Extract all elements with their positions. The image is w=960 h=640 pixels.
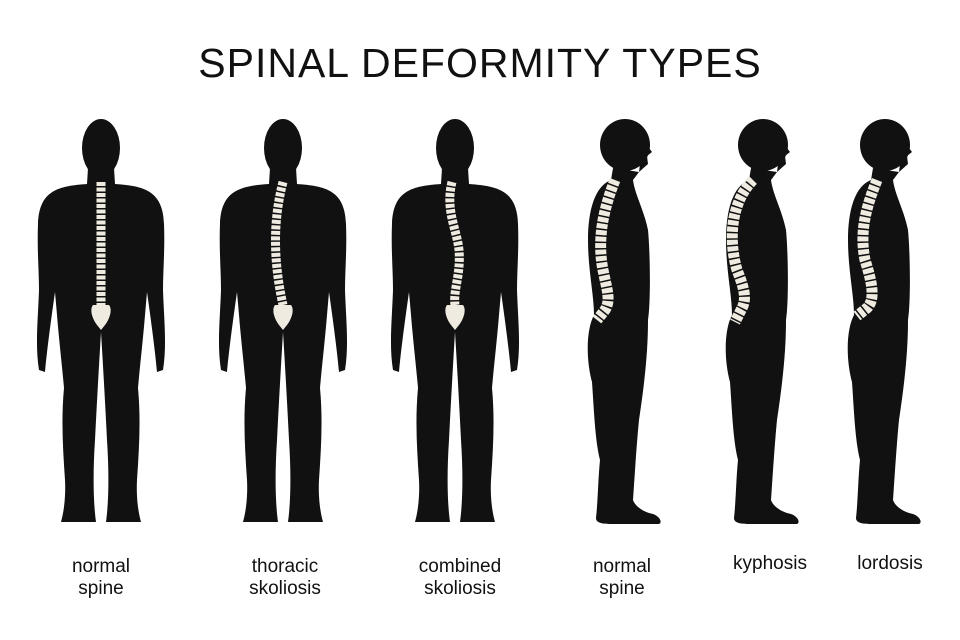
- figure: thoracic scoliosis: [219, 119, 347, 522]
- label: normal spine: normal: [72, 556, 130, 577]
- label: normal spine side: normal: [593, 556, 651, 577]
- label: thoracic skoliosis: thoracic: [252, 556, 318, 577]
- label: normal spine: [72, 556, 130, 599]
- label: combined skoliosis: combined: [419, 556, 501, 577]
- label: combined skoliosis: [419, 556, 501, 599]
- label: thoracic skoliosis: [249, 556, 321, 599]
- figure: kyphosis: [726, 119, 799, 524]
- figure: lordosis: [848, 119, 921, 524]
- label: normal spine side: spine: [599, 578, 645, 599]
- label: thoracic skoliosis: skoliosis: [249, 578, 321, 599]
- label: lordosis: lordosis: [857, 553, 923, 574]
- figure: side normal: [588, 119, 661, 524]
- label: normal spine side: [593, 556, 651, 599]
- title: SPINAL DEFORMITY TYPES: [198, 40, 762, 86]
- label: normal spine: spine: [78, 578, 124, 599]
- figure: front normal: [37, 119, 165, 522]
- figure: combined scoliosis: [391, 119, 519, 522]
- label: kyphosis: kyphosis: [733, 553, 807, 574]
- label: combined skoliosis: skoliosis: [424, 578, 496, 599]
